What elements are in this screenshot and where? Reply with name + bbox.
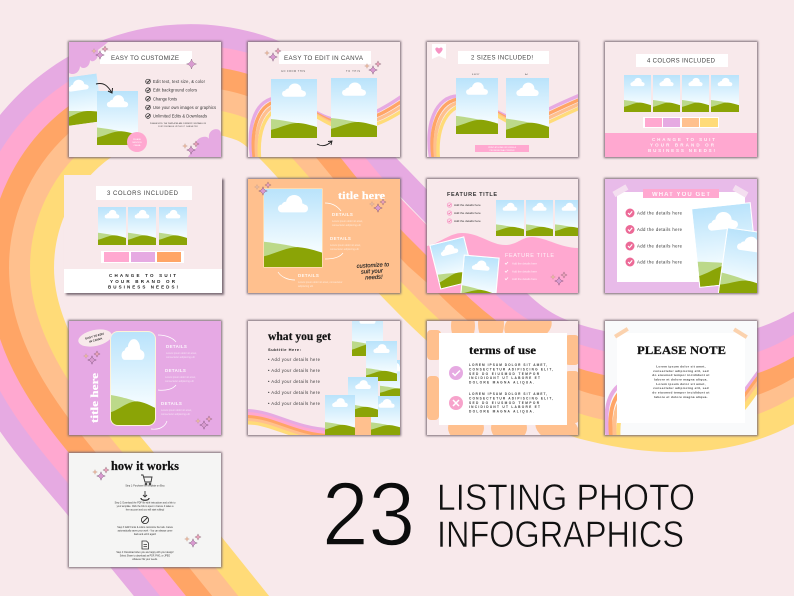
arrow — [317, 141, 332, 146]
pink band message: CHANGE TO SUIT — [652, 137, 715, 142]
pink badge: CANVA — [134, 144, 141, 147]
list: • Add your details here — [268, 390, 321, 395]
step 3 — [117, 526, 173, 536]
feature text: Add the details here — [512, 270, 537, 274]
photo before — [271, 79, 317, 138]
subtitle: Subtitle Here: — [268, 347, 301, 352]
checklist: Unlimited Edits & Downloads — [153, 114, 207, 118]
labels: TO THIS — [346, 70, 360, 73]
icon: download — [141, 491, 149, 500]
terms text 2: INCIDIDUNT UT LABORE ET — [469, 405, 540, 409]
white band message: BUSINESS NEEDS! — [108, 284, 178, 290]
small rainbow right — [735, 365, 765, 415]
sparkles — [264, 48, 281, 61]
list: Add the details here — [637, 227, 683, 232]
pink badge: PLEASE — [133, 138, 142, 141]
labels — [472, 73, 528, 76]
details 2: Lorem ipsum dolor sit amet, — [330, 244, 361, 247]
sparkles — [370, 199, 386, 212]
photo after — [331, 78, 377, 137]
heading: EASY TO EDIT IN CANVA — [284, 55, 364, 62]
pink wave — [427, 233, 579, 293]
tape — [612, 184, 748, 198]
feature text: FEATURE TITLE — [505, 253, 554, 259]
step 1: Step 1: Purchase the template on Etsy — [125, 484, 165, 488]
heading: how it works — [111, 459, 179, 473]
details 2 — [158, 368, 196, 390]
photos — [98, 207, 187, 245]
labels — [281, 70, 360, 73]
list: Add the details here — [454, 211, 481, 215]
details 1: Lorem ipsum dolor sit amet, — [166, 352, 197, 355]
pink band message — [605, 133, 757, 157]
sparkles — [84, 351, 100, 364]
colour swatches — [101, 251, 184, 263]
note text: CUSTOMIZABLE WITHOUT CANVA PRO — [158, 125, 199, 128]
step 3: back and edit it again! — [134, 533, 157, 536]
pink band message: BUSINESS NEEDS! — [648, 148, 716, 153]
sparkles — [196, 416, 212, 429]
details 1: consectetur adipiscing elit — [166, 356, 195, 359]
heading: what you get — [268, 331, 331, 343]
tape — [614, 327, 748, 339]
body text: consectetur adipiscing elit, sed — [653, 369, 709, 373]
cloud tag — [77, 327, 113, 349]
tilted photo — [57, 73, 103, 127]
title: title here — [338, 191, 385, 202]
details 3: adipiscing elit — [298, 285, 313, 288]
list: Add the details here — [454, 219, 481, 223]
list — [447, 202, 481, 224]
list: • Add your details here — [268, 401, 321, 406]
terms text 2: SED DO EIUSMOD TEMPOR — [469, 401, 540, 405]
panel: title here purple — [68, 320, 222, 436]
sparkles — [184, 534, 201, 547]
note text: PLEASE NOTE: THE TEMPLATES ARE CURRENTLY EDITABLE ON — [150, 122, 207, 125]
terms text 1: CONSECTETUR ADIPISCING ELIT, — [469, 367, 553, 371]
white note — [617, 333, 745, 423]
heart ribbon icon — [432, 44, 446, 59]
step 3: Step 3: Edit! Fonts & colors customize the look. Canva — [117, 526, 173, 529]
photos — [624, 75, 739, 112]
details 1 — [325, 203, 363, 227]
heading: PLEASE NOTE — [637, 345, 726, 357]
cloud tag: IN CANVA — [89, 336, 103, 344]
details 2 — [325, 236, 361, 259]
step 4: Select Share to download as PDF, PNG, or JPEG — [120, 554, 170, 558]
details 3 — [278, 272, 343, 288]
small rainbow — [240, 411, 330, 442]
pink bar — [475, 145, 529, 152]
photo large — [506, 78, 549, 138]
tilted photo — [718, 227, 777, 301]
details 2: consectetur adipiscing elit — [165, 380, 194, 383]
panel: what you get list — [240, 310, 410, 442]
panel: 2 sizes included — [426, 41, 594, 169]
list: Add the details here — [637, 210, 683, 216]
icon: document — [142, 541, 148, 549]
note text — [150, 122, 207, 128]
sparkles — [254, 182, 271, 195]
terms text 1 — [469, 363, 553, 385]
feature text: Add the details here — [512, 262, 537, 266]
photo small — [456, 78, 498, 134]
list — [268, 357, 321, 406]
list: • Add your details here — [268, 368, 321, 373]
main photo — [97, 91, 138, 145]
sparkles — [182, 141, 199, 154]
step 3: automatically saves your work - You can always come — [118, 530, 173, 532]
step 2: Step 2: Download the PDF file with instructions and a link to — [115, 502, 176, 504]
details 3: DETAILS — [298, 273, 319, 278]
panel: what you get purple — [604, 178, 777, 301]
photo collage — [325, 310, 410, 435]
pink heading — [643, 189, 719, 198]
small rainbow left — [606, 382, 636, 452]
details 2: consectetur adipiscing elit — [330, 248, 359, 251]
headline: LISTING PHOTO — [437, 477, 695, 518]
details 3 — [151, 401, 192, 429]
vertical title: title here — [90, 372, 101, 423]
details 1: DETAILS — [332, 212, 353, 217]
white note — [617, 192, 745, 282]
script note: suit your — [361, 268, 384, 276]
white band message: CHANGE TO SUIT — [109, 273, 176, 278]
cross icon — [449, 396, 463, 410]
framed photo — [264, 188, 322, 268]
heading — [96, 186, 192, 200]
headline — [437, 477, 695, 555]
terms text 1: SED DO EIUSMOD TEMPOR — [469, 372, 540, 376]
small rainbow — [429, 93, 594, 169]
heading — [100, 51, 192, 64]
terms text 2: CONSECTETUR ADIPISCING ELIT, — [469, 396, 553, 400]
script note — [357, 262, 390, 281]
checklist: Use your own images or graphics — [153, 105, 216, 110]
tilted photo — [460, 255, 500, 303]
details 1: DETAILS — [166, 344, 187, 349]
list: • Add your details here — [268, 379, 321, 384]
big number: 23 — [322, 465, 415, 565]
body text: Lorem ipsum dolor sit amet, — [656, 364, 706, 368]
script note: customize to — [357, 262, 390, 270]
flower corner bottom right — [188, 129, 221, 157]
details 3: Lorem ipsum dolor sit amet, — [161, 409, 192, 412]
script note: needs! — [365, 275, 383, 281]
step 2: your template. Click the link to open in Canva. It takes a — [117, 505, 174, 508]
panel: 4 colors included — [604, 41, 758, 158]
check icon — [449, 366, 463, 380]
step 2: free account and you will start editing! — [126, 508, 165, 512]
panel: easy to customize — [57, 41, 222, 158]
panel: feature title — [426, 178, 583, 303]
list: Add the details here — [454, 203, 481, 207]
panel: title here peach — [247, 178, 401, 294]
details 1: consectetur adipiscing elit — [332, 224, 361, 227]
step 4: whatever fits your needs. — [132, 558, 158, 561]
list: • Add your details here — [268, 357, 321, 362]
cloud tag: EASY TO EDIT — [85, 332, 105, 340]
pink band message: YOUR BRAND OR — [650, 142, 715, 148]
rounded photo — [110, 331, 156, 426]
heading: FEATURE TITLE — [447, 192, 497, 198]
white note — [439, 333, 567, 425]
checklist: Edit background colors — [153, 88, 197, 93]
icon: circle edit — [141, 516, 149, 524]
details 3: DETAILS — [161, 401, 182, 406]
labels: 8.5X11" — [472, 74, 480, 76]
panel: 3 colors included — [64, 175, 224, 295]
heading — [458, 51, 549, 64]
heading: 2 SIZES INCLUDED! — [471, 56, 533, 62]
details 3: consectetur adipiscing elit — [161, 413, 190, 416]
body text: labore et dolore magna aliqua. — [654, 395, 708, 399]
checklist: Edit text, text size, & color — [153, 79, 206, 84]
pink bar: PRINT AT HOME OR USING A — [488, 146, 516, 149]
heading — [636, 54, 728, 67]
sparkles — [364, 61, 381, 74]
white band message: YOUR BRAND OR — [110, 279, 176, 284]
details 1: Lorem ipsum dolor sit amet, — [332, 220, 363, 223]
step 4 — [116, 551, 174, 561]
arrow — [96, 83, 112, 93]
headline: INFOGRAPHICS — [437, 514, 684, 555]
panel: terms of use — [426, 304, 582, 447]
list: Add the details here — [637, 244, 683, 248]
pink bar: PROFESSIONAL PRINTER — [490, 149, 515, 152]
heading: 3 COLORS INCLUDED — [107, 191, 179, 197]
step 4: Step 4: Download when you are happy with your design! — [116, 551, 174, 554]
heading: EASY TO CUSTOMIZE — [111, 55, 179, 62]
white band message — [64, 269, 222, 293]
body text — [652, 364, 710, 399]
details 2: DETAILS — [165, 368, 186, 373]
terms text 2: LOREM IPSUM DOLOR SIT AMET, — [469, 392, 547, 396]
terms text 1: LOREM IPSUM DOLOR SIT AMET, — [469, 363, 547, 367]
tilted photo — [429, 236, 475, 290]
details 3: Lorem ipsum dolor sit amet, consectetur — [298, 281, 343, 284]
panel: how it works — [68, 452, 222, 568]
list — [626, 208, 683, 266]
feature text — [505, 253, 554, 281]
heading: 4 COLORS INCLUDED — [647, 58, 716, 64]
peach petals — [427, 304, 582, 447]
body text: do eiusmod tempor incididunt ut — [652, 373, 710, 377]
sparkle — [186, 59, 196, 69]
details 1 — [158, 335, 197, 359]
body text: Lorem ipsum dolor sit amet, — [656, 382, 706, 386]
details 2: DETAILS — [330, 236, 351, 241]
icon: cart — [141, 475, 152, 485]
panel: easy to edit in canva — [247, 41, 414, 169]
sparkles — [92, 46, 108, 59]
terms text 2: DOLORE MAGNA ALIQUA. — [469, 410, 534, 414]
checklist: Change fonts — [153, 96, 177, 101]
terms text 1: DOLORE MAGNA ALIQUA. — [469, 381, 534, 385]
pink badge — [127, 132, 147, 152]
heading — [279, 51, 371, 64]
list: Add the details here — [637, 260, 683, 264]
terms text 1: INCIDIDUNT UT LABORE ET — [469, 376, 540, 380]
pink heading: WHAT YOU GET — [652, 192, 710, 198]
step 2 — [115, 502, 176, 512]
details 2: Lorem ipsum dolor sit amet, — [165, 376, 196, 379]
flower corner top left — [69, 42, 108, 74]
colour swatches — [643, 117, 719, 128]
body text: labore et dolore magna aliqua. — [654, 378, 708, 382]
small rainbow — [250, 94, 414, 169]
labels: A4 — [525, 73, 528, 76]
sparkles — [550, 272, 567, 285]
sparkles — [92, 467, 109, 480]
checklist — [146, 79, 216, 118]
heading: terms of use — [469, 343, 537, 357]
labels: GO FROM THIS — [281, 70, 305, 73]
body text: consectetur adipiscing elit, sed — [653, 386, 709, 390]
tilted photo — [691, 202, 759, 288]
panel: please note — [604, 320, 765, 452]
pink badge: MENTION — [132, 142, 142, 144]
body text: do eiusmod tempor incididunt ut — [652, 390, 710, 394]
feature text: Add the details here — [512, 277, 537, 281]
photos — [496, 200, 583, 236]
terms text 2 — [469, 392, 553, 414]
